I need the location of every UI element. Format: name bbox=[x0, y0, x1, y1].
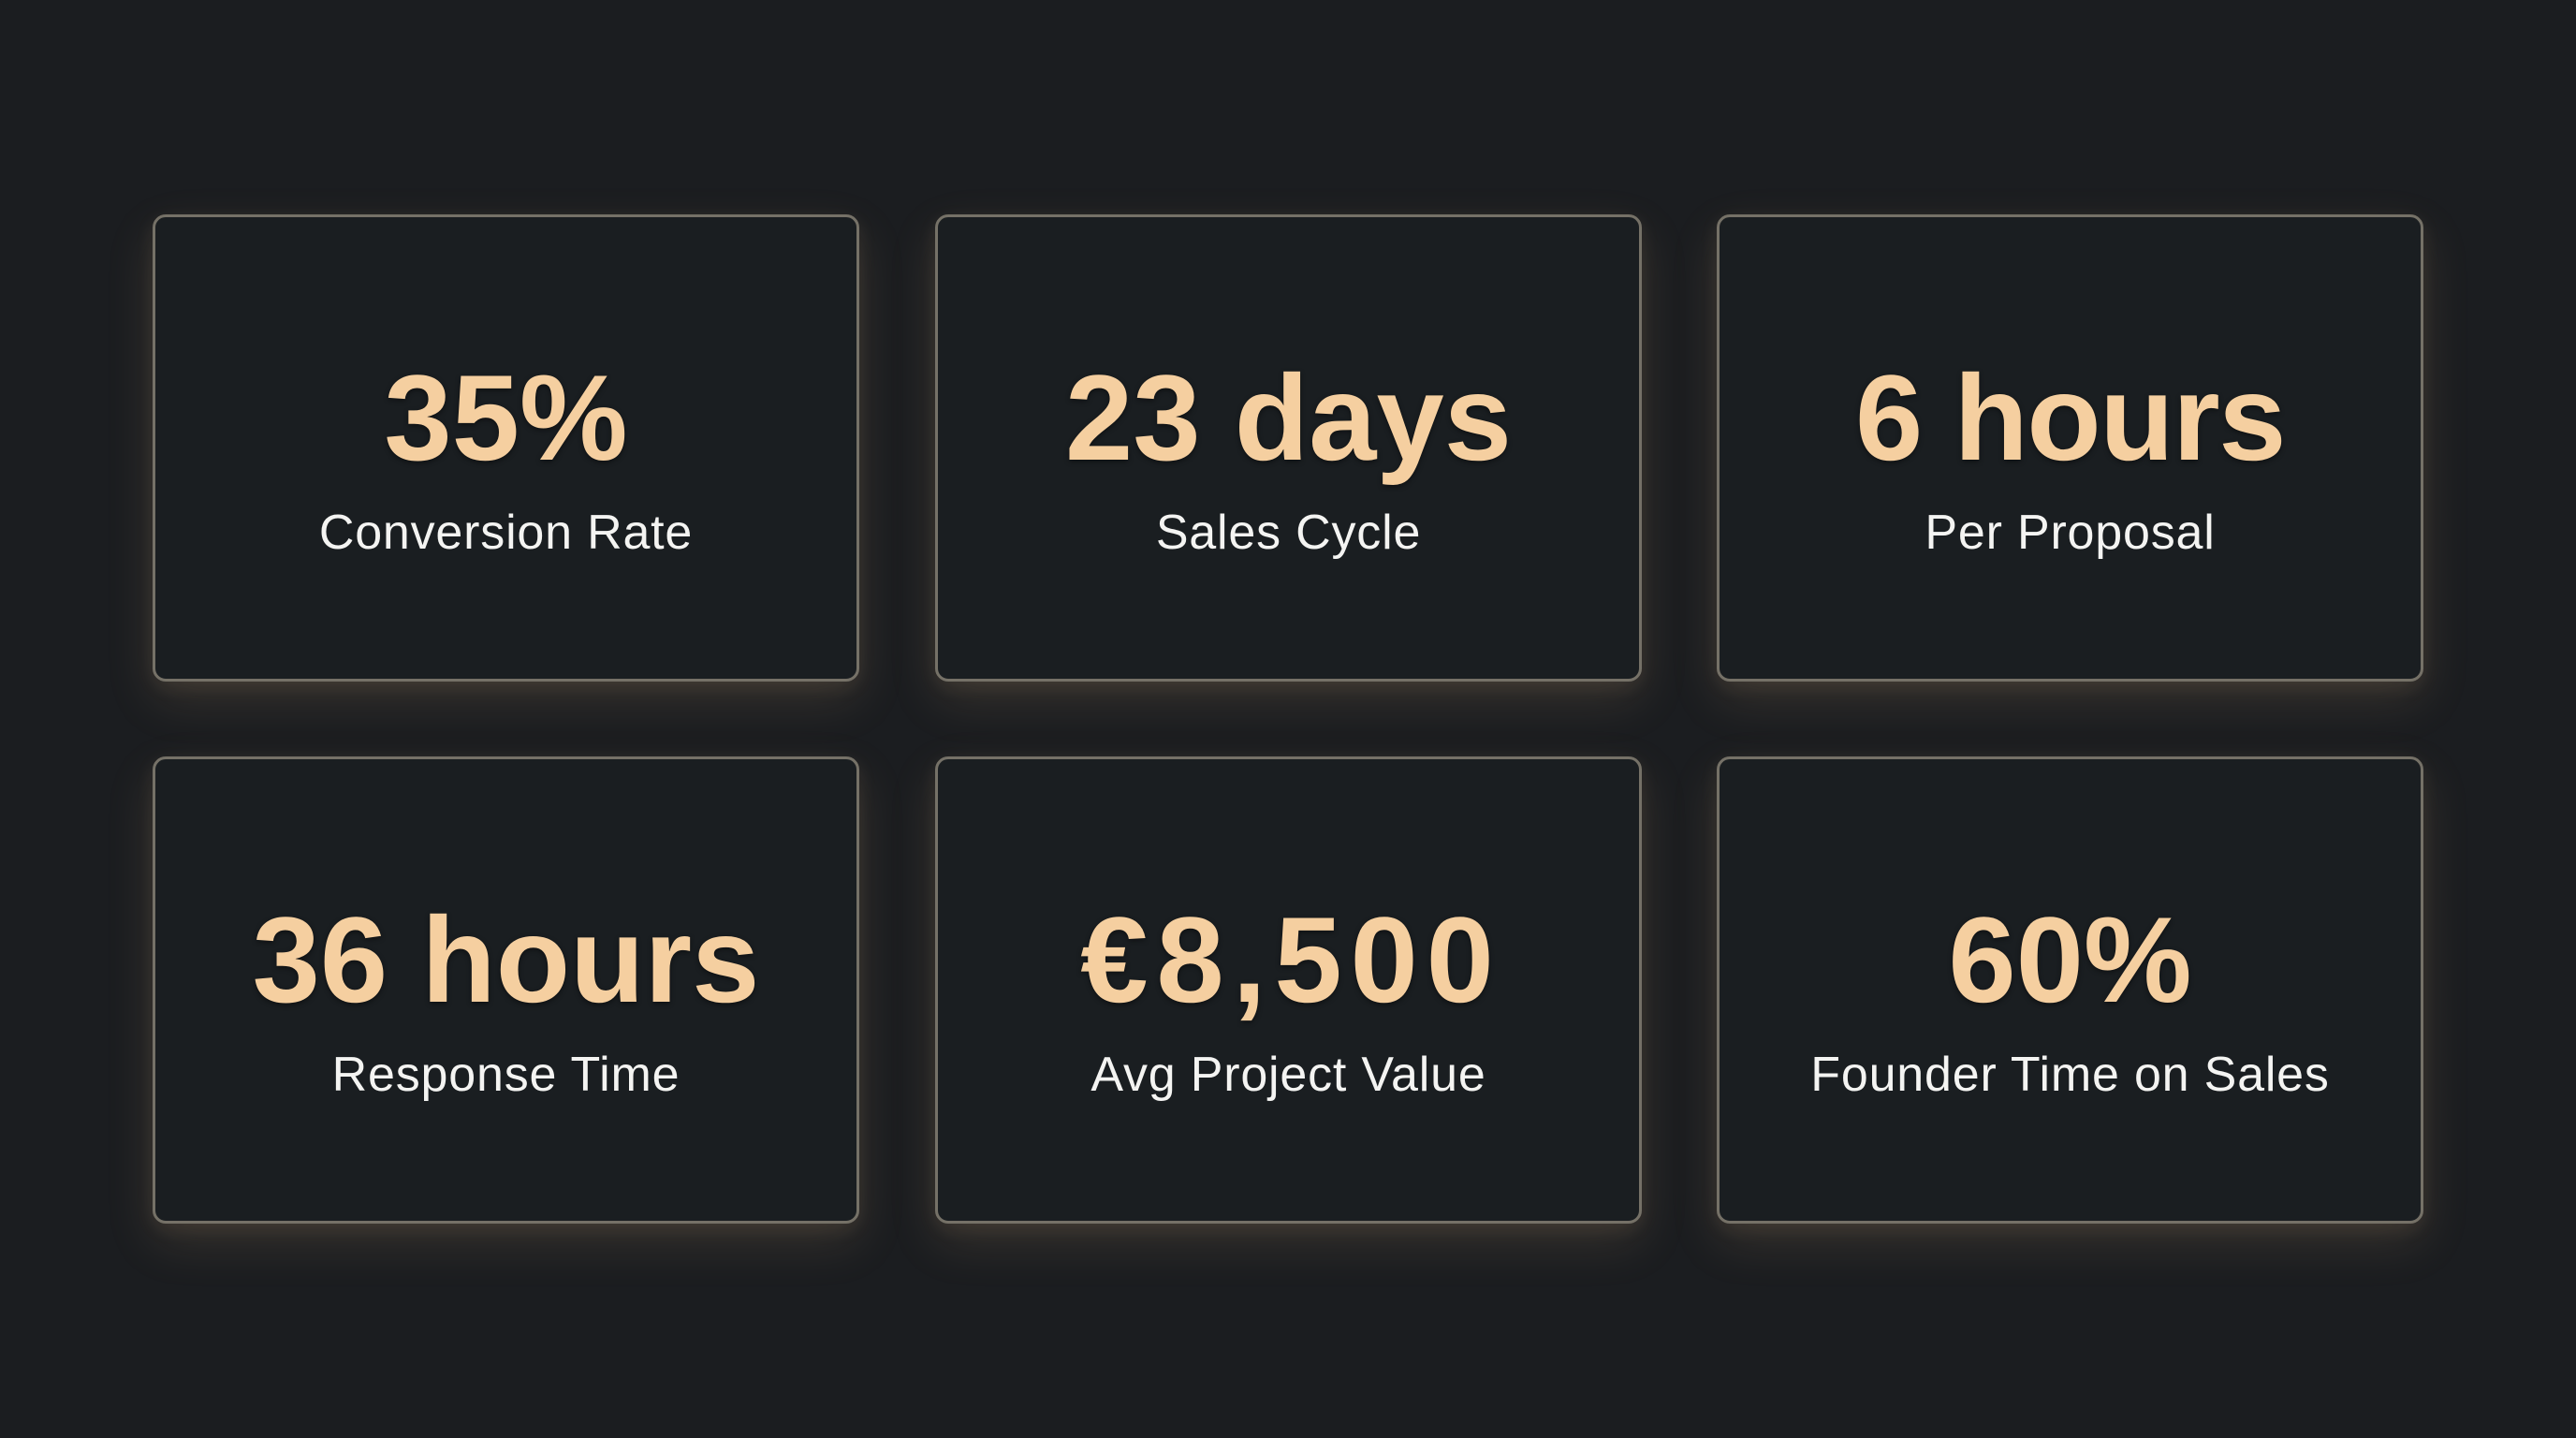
metric label: per proposal: Per Proposal bbox=[1925, 506, 2216, 560]
metric label: response time: Response Time bbox=[332, 1048, 680, 1102]
panel: per proposal bbox=[1717, 214, 2423, 682]
panel: sales cycle bbox=[935, 214, 1642, 682]
metric value: 35%: 35% bbox=[384, 349, 628, 486]
metric value: 36 hours: 36 hours bbox=[253, 891, 759, 1028]
metric label: conversion rate: Conversion Rate bbox=[319, 506, 693, 560]
metric label: founder time on sales: Founder Time on Sales bbox=[1810, 1048, 2330, 1102]
metric value: 23 days: 23 days bbox=[1065, 349, 1512, 486]
metric label: average project value: Avg Project Value bbox=[1090, 1048, 1486, 1102]
metric label: sales cycle: Sales Cycle bbox=[1156, 506, 1421, 560]
panel: founder time on sales bbox=[1717, 756, 2423, 1224]
metric value: 6 hours: 6 hours bbox=[1855, 349, 2285, 486]
metric value: 60%: 60% bbox=[1948, 891, 2192, 1028]
panel: conversion rate bbox=[153, 214, 859, 682]
panel: response time bbox=[153, 756, 859, 1224]
panel: average project value bbox=[935, 756, 1642, 1224]
metric value: €8,500: €8,500 bbox=[1080, 891, 1502, 1028]
